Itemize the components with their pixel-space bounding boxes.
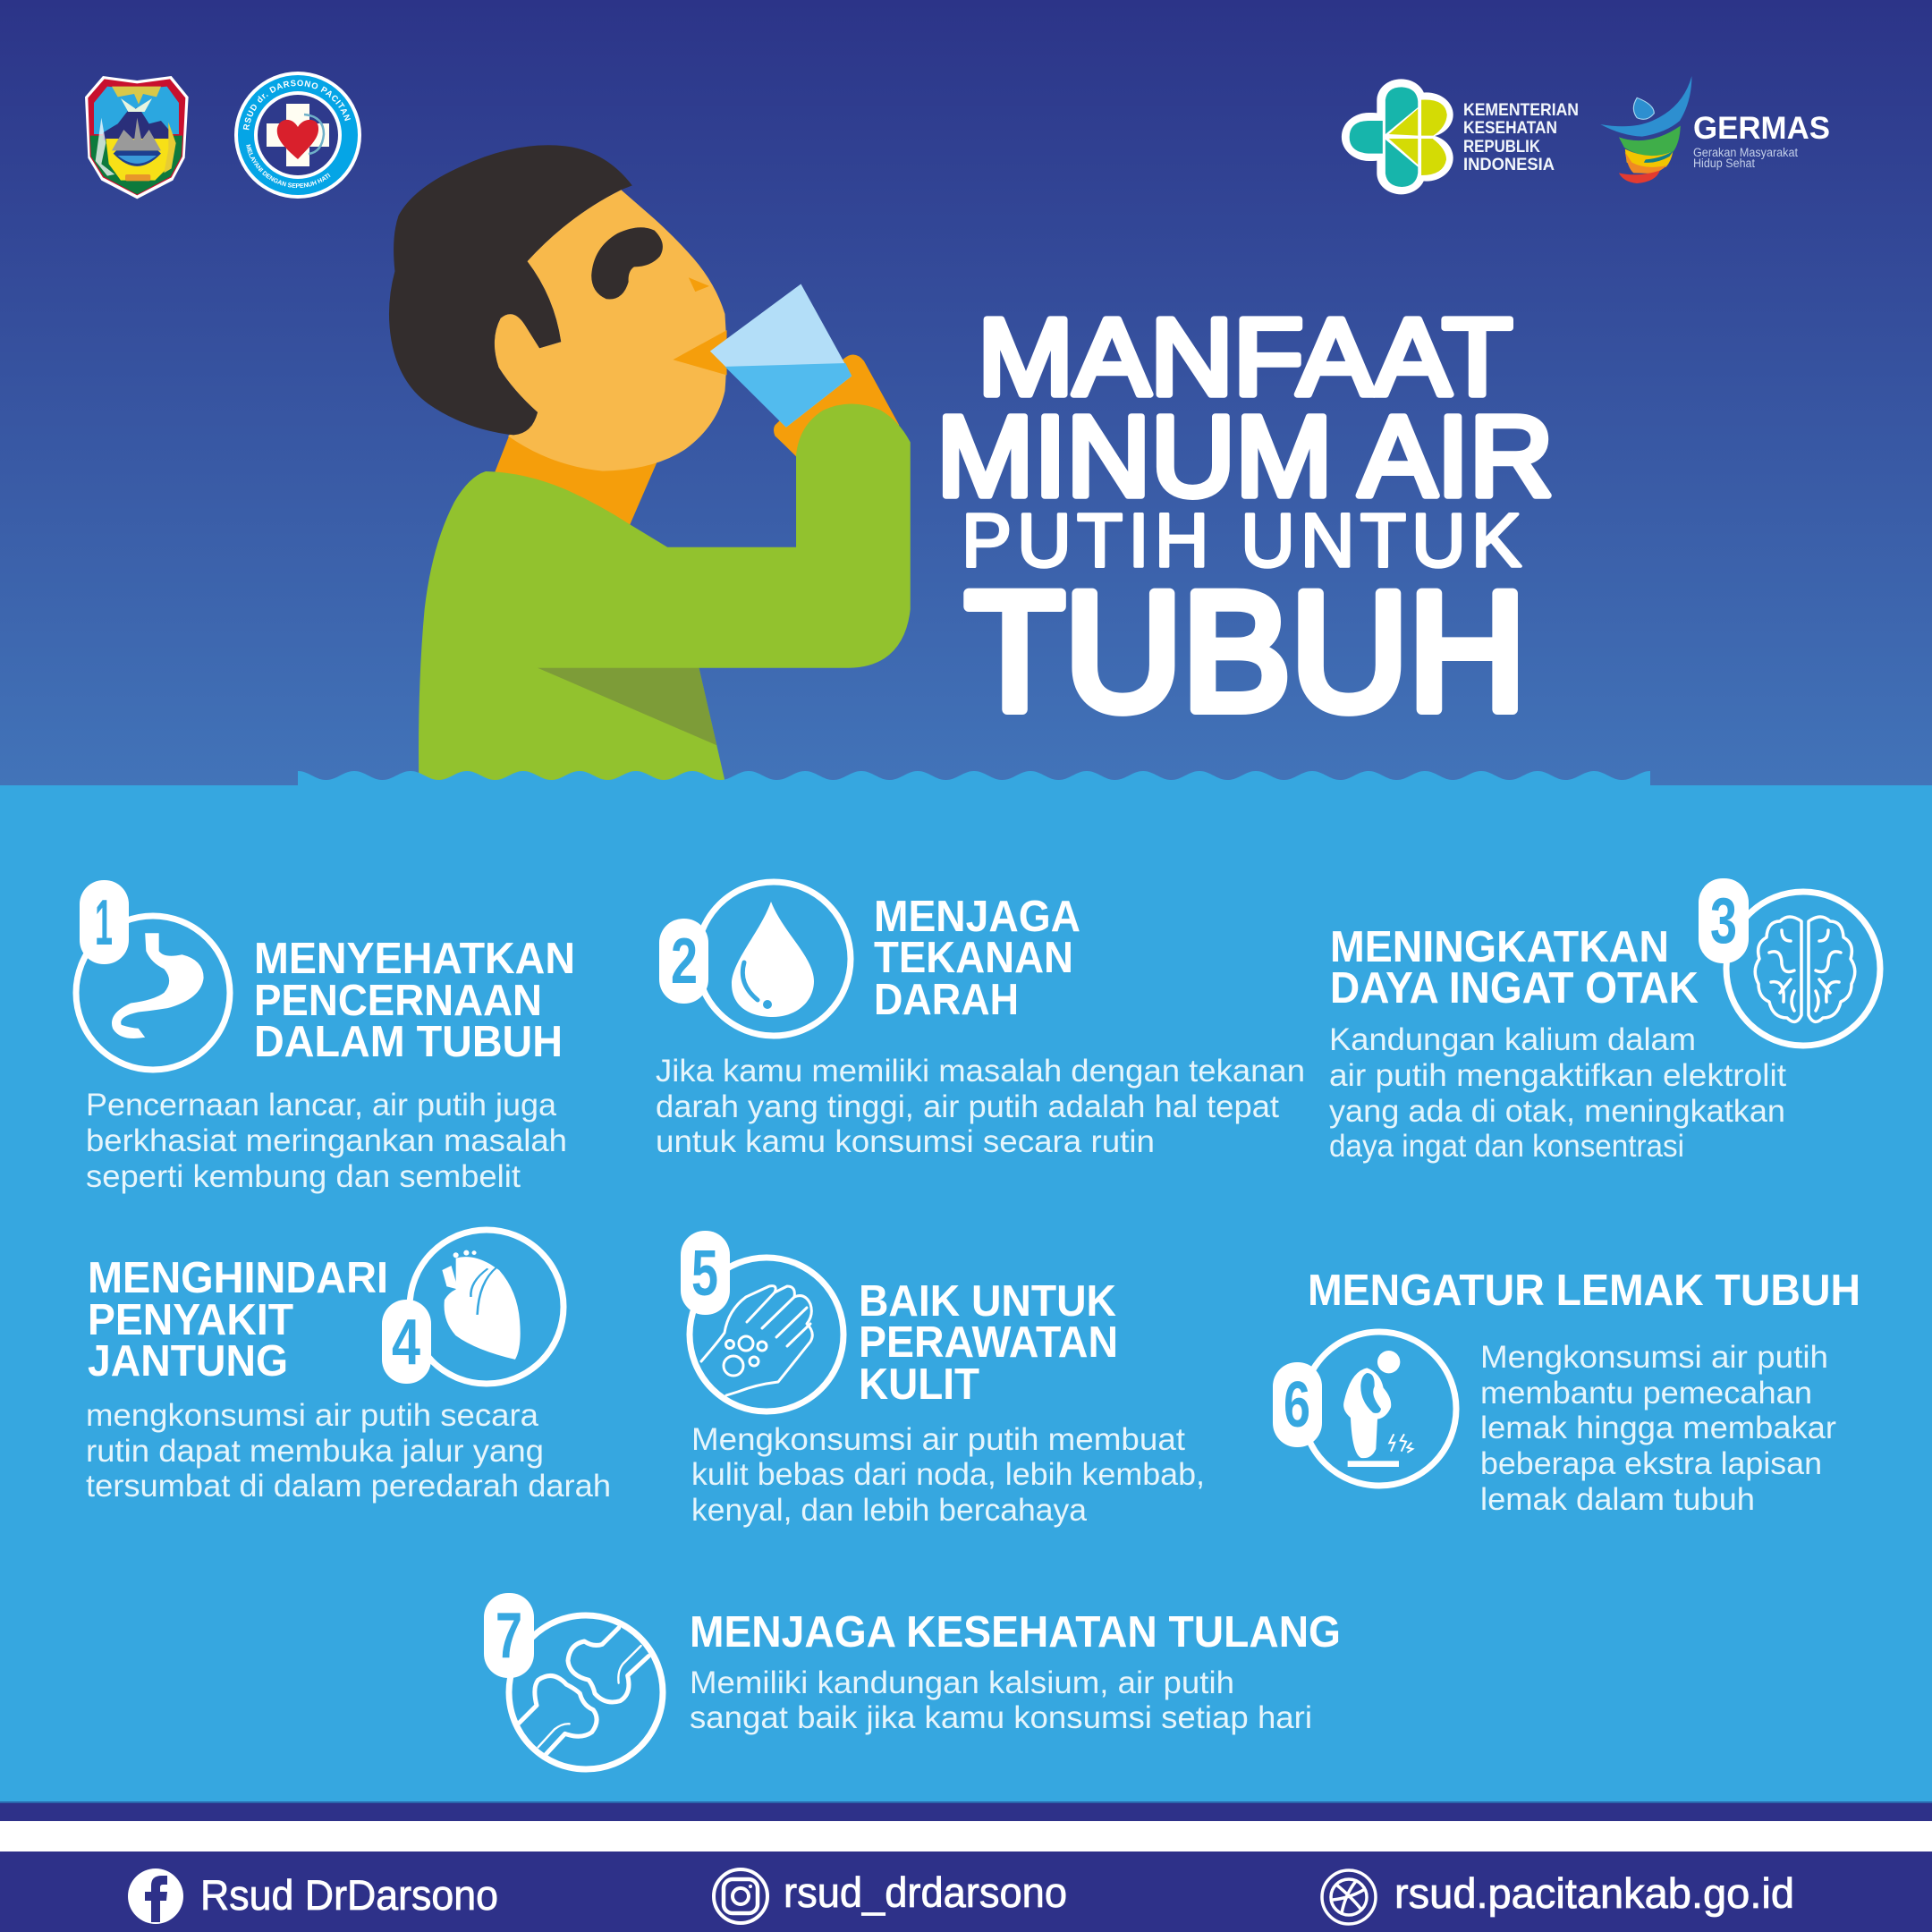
nose mark <box>689 277 709 292</box>
footer: instagram <box>714 1868 1067 1923</box>
logo: Pacitan regency shield <box>85 76 189 199</box>
item 6: lemak tubuh <box>1273 1267 1860 1517</box>
heading: MENJAGA KESEHATAN TULANG <box>690 1608 1341 1657</box>
body text: membantu pemecahan <box>1480 1376 1812 1411</box>
heading <box>859 1277 1118 1409</box>
body text: rutin dapat membuka jalur yang <box>86 1434 544 1469</box>
heading: MENGHINDARI <box>88 1254 388 1302</box>
body text: darah yang tinggi, air putih adalah hal tepat <box>656 1089 1279 1124</box>
body and arm <box>419 403 911 789</box>
hand <box>774 354 899 460</box>
icon: facebook <box>128 1868 183 1924</box>
icon: instagram <box>714 1869 767 1923</box>
water in glass <box>724 363 852 428</box>
footer: website: rsud.pacitankab.go.id <box>1394 1869 1794 1917</box>
body text: lemak hingga membakar <box>1480 1411 1836 1445</box>
ministry name: KESEHATAN <box>1463 119 1557 138</box>
title: MANFAAT <box>978 296 1513 418</box>
body text <box>1329 1022 1786 1164</box>
icon: stomach <box>76 880 230 1070</box>
body text: sangat baik jika kamu konsumsi setiap hari <box>690 1700 1312 1735</box>
heading: KULIT <box>859 1360 979 1409</box>
title <box>936 296 1554 745</box>
body text: Mengkonsumsi air putih <box>1480 1340 1828 1375</box>
logo: GERMAS: Hidup Sehat <box>1693 157 1755 170</box>
body text: seperti kembung dan sembelit <box>86 1159 521 1194</box>
icon: hand with bubbles: 5 <box>691 1238 718 1309</box>
body text <box>691 1422 1205 1528</box>
heading <box>254 935 575 1066</box>
body text: beberapa ekstra lapisan <box>1480 1446 1822 1481</box>
body text <box>656 1054 1305 1159</box>
heading <box>1330 923 1699 1013</box>
heading: MENYEHATKAN <box>254 935 575 983</box>
heading: DALAM TUBUH <box>254 1018 563 1066</box>
heading <box>874 893 1080 1024</box>
heading: DAYA INGAT OTAK <box>1330 964 1699 1013</box>
icon: overweight person on scale: 6 <box>1284 1369 1310 1441</box>
icon: water drop: 2 <box>671 926 698 997</box>
icon: heart organ: 4 <box>392 1307 420 1378</box>
icon: bone joint <box>484 1593 663 1769</box>
glass <box>710 284 852 428</box>
body text: lemak dalam tubuh <box>1480 1482 1755 1517</box>
heading: MENINGKATKAN <box>1330 923 1669 971</box>
title: PUTIH UNTUK <box>962 498 1521 582</box>
title: MINUM AIR <box>936 393 1554 521</box>
body text <box>1480 1340 1836 1517</box>
logo: RSUD dr. Darsono Pacitan badge <box>234 72 361 199</box>
heading: PENYAKIT <box>88 1296 293 1344</box>
icon: stomach: 1 <box>95 887 113 959</box>
body text: berkhasiat meringankan masalah <box>86 1123 567 1158</box>
illustration: man drinking water <box>389 145 911 789</box>
cross <box>267 104 329 166</box>
body text: Pencernaan lancar, air putih juga <box>86 1088 557 1123</box>
ministry name: INDONESIA <box>1463 156 1555 174</box>
water panel <box>0 771 1932 1802</box>
body text: yang ada di otak, meningkatkan <box>1329 1094 1785 1129</box>
body text: tersumbat di dalam peredarah darah <box>86 1469 611 1504</box>
ministry name <box>1463 101 1579 174</box>
heart <box>277 120 318 159</box>
item 5: kulit <box>681 1231 1205 1528</box>
heading: JANTUNG <box>88 1337 288 1385</box>
item 3: daya ingat <box>1329 878 1880 1164</box>
face <box>495 190 726 471</box>
logo: GERMAS: Gerakan Masyarakat <box>1693 146 1798 159</box>
lips <box>673 330 727 375</box>
heading: MENJAGA <box>874 893 1080 941</box>
body text: kulit bebas dari noda, lebih kembab, <box>691 1457 1205 1492</box>
body text: Jika kamu memiliki masalah dengan tekanan <box>656 1054 1305 1089</box>
eyebrow <box>591 227 663 299</box>
heading: DARAH <box>874 976 1019 1024</box>
body text: Kandungan kalium dalam <box>1329 1022 1696 1057</box>
logo: RSUD dr. Darsono Pacitan badge: RSUD dr. DARSONO PACITAN <box>243 80 351 131</box>
heading: PENCERNAAN <box>254 977 542 1025</box>
body text <box>86 1088 567 1194</box>
logo: RSUD dr. Darsono Pacitan badge: MELAYANI DENGAN SEPENUH HATI <box>246 144 331 188</box>
item 1: pencernaan <box>76 880 575 1194</box>
heading: PERAWATAN <box>859 1318 1118 1367</box>
icon: dribbble globe <box>1322 1870 1376 1924</box>
footer: facebook <box>128 1868 498 1924</box>
body text: untuk kamu konsumsi secara rutin <box>656 1124 1155 1159</box>
ministry name: REPUBLIK <box>1463 138 1540 157</box>
icon: overweight person on scale <box>1273 1332 1456 1486</box>
sky background <box>0 0 1932 787</box>
icon: brain: 3 <box>1710 886 1737 957</box>
heading <box>88 1254 388 1385</box>
body text <box>690 1665 1312 1735</box>
body text: mengkonsumsi air putih secara <box>86 1398 539 1433</box>
ministry name: KEMENTERIAN <box>1463 101 1579 120</box>
footer band <box>0 1801 1932 1932</box>
figure <box>1600 76 1691 183</box>
hair <box>389 145 632 435</box>
logo: GERMAS: GERMAS <box>1693 111 1830 146</box>
icon: bone joint: 7 <box>496 1600 522 1672</box>
logo: Kementerian Kesehatan <box>1342 79 1579 194</box>
item 7: tulang <box>484 1593 1341 1769</box>
logo: GERMAS <box>1600 76 1830 183</box>
icon: water drop <box>659 882 851 1036</box>
heading: BAIK UNTUK <box>859 1277 1116 1326</box>
neck <box>493 434 660 528</box>
body text: Memiliki kandungan kalsium, air putih <box>690 1665 1234 1700</box>
title: TUBUH <box>965 557 1526 745</box>
heading: MENGATUR LEMAK TUBUH <box>1308 1267 1860 1315</box>
shirt shadow <box>538 668 716 745</box>
icon: heart organ <box>382 1230 564 1384</box>
logo mark <box>1342 79 1453 194</box>
footer: facebook: Rsud DrDarsono <box>200 1871 498 1919</box>
body text: Mengkonsumsi air putih membuat <box>691 1422 1185 1457</box>
body text <box>86 1398 611 1504</box>
item 2: tekanan darah <box>656 882 1305 1159</box>
footer: instagram: rsud_drdarsono <box>784 1868 1067 1916</box>
body text: air putih mengaktifkan elektrolit <box>1329 1058 1786 1093</box>
body text: kenyal, dan lebih bercahaya <box>691 1493 1088 1528</box>
item 4: jantung <box>86 1230 611 1504</box>
heading: TEKANAN <box>874 934 1073 982</box>
body text: daya ingat dan konsentrasi <box>1329 1129 1684 1164</box>
icon: hand with bubbles <box>681 1231 843 1411</box>
icon: brain <box>1699 878 1880 1046</box>
